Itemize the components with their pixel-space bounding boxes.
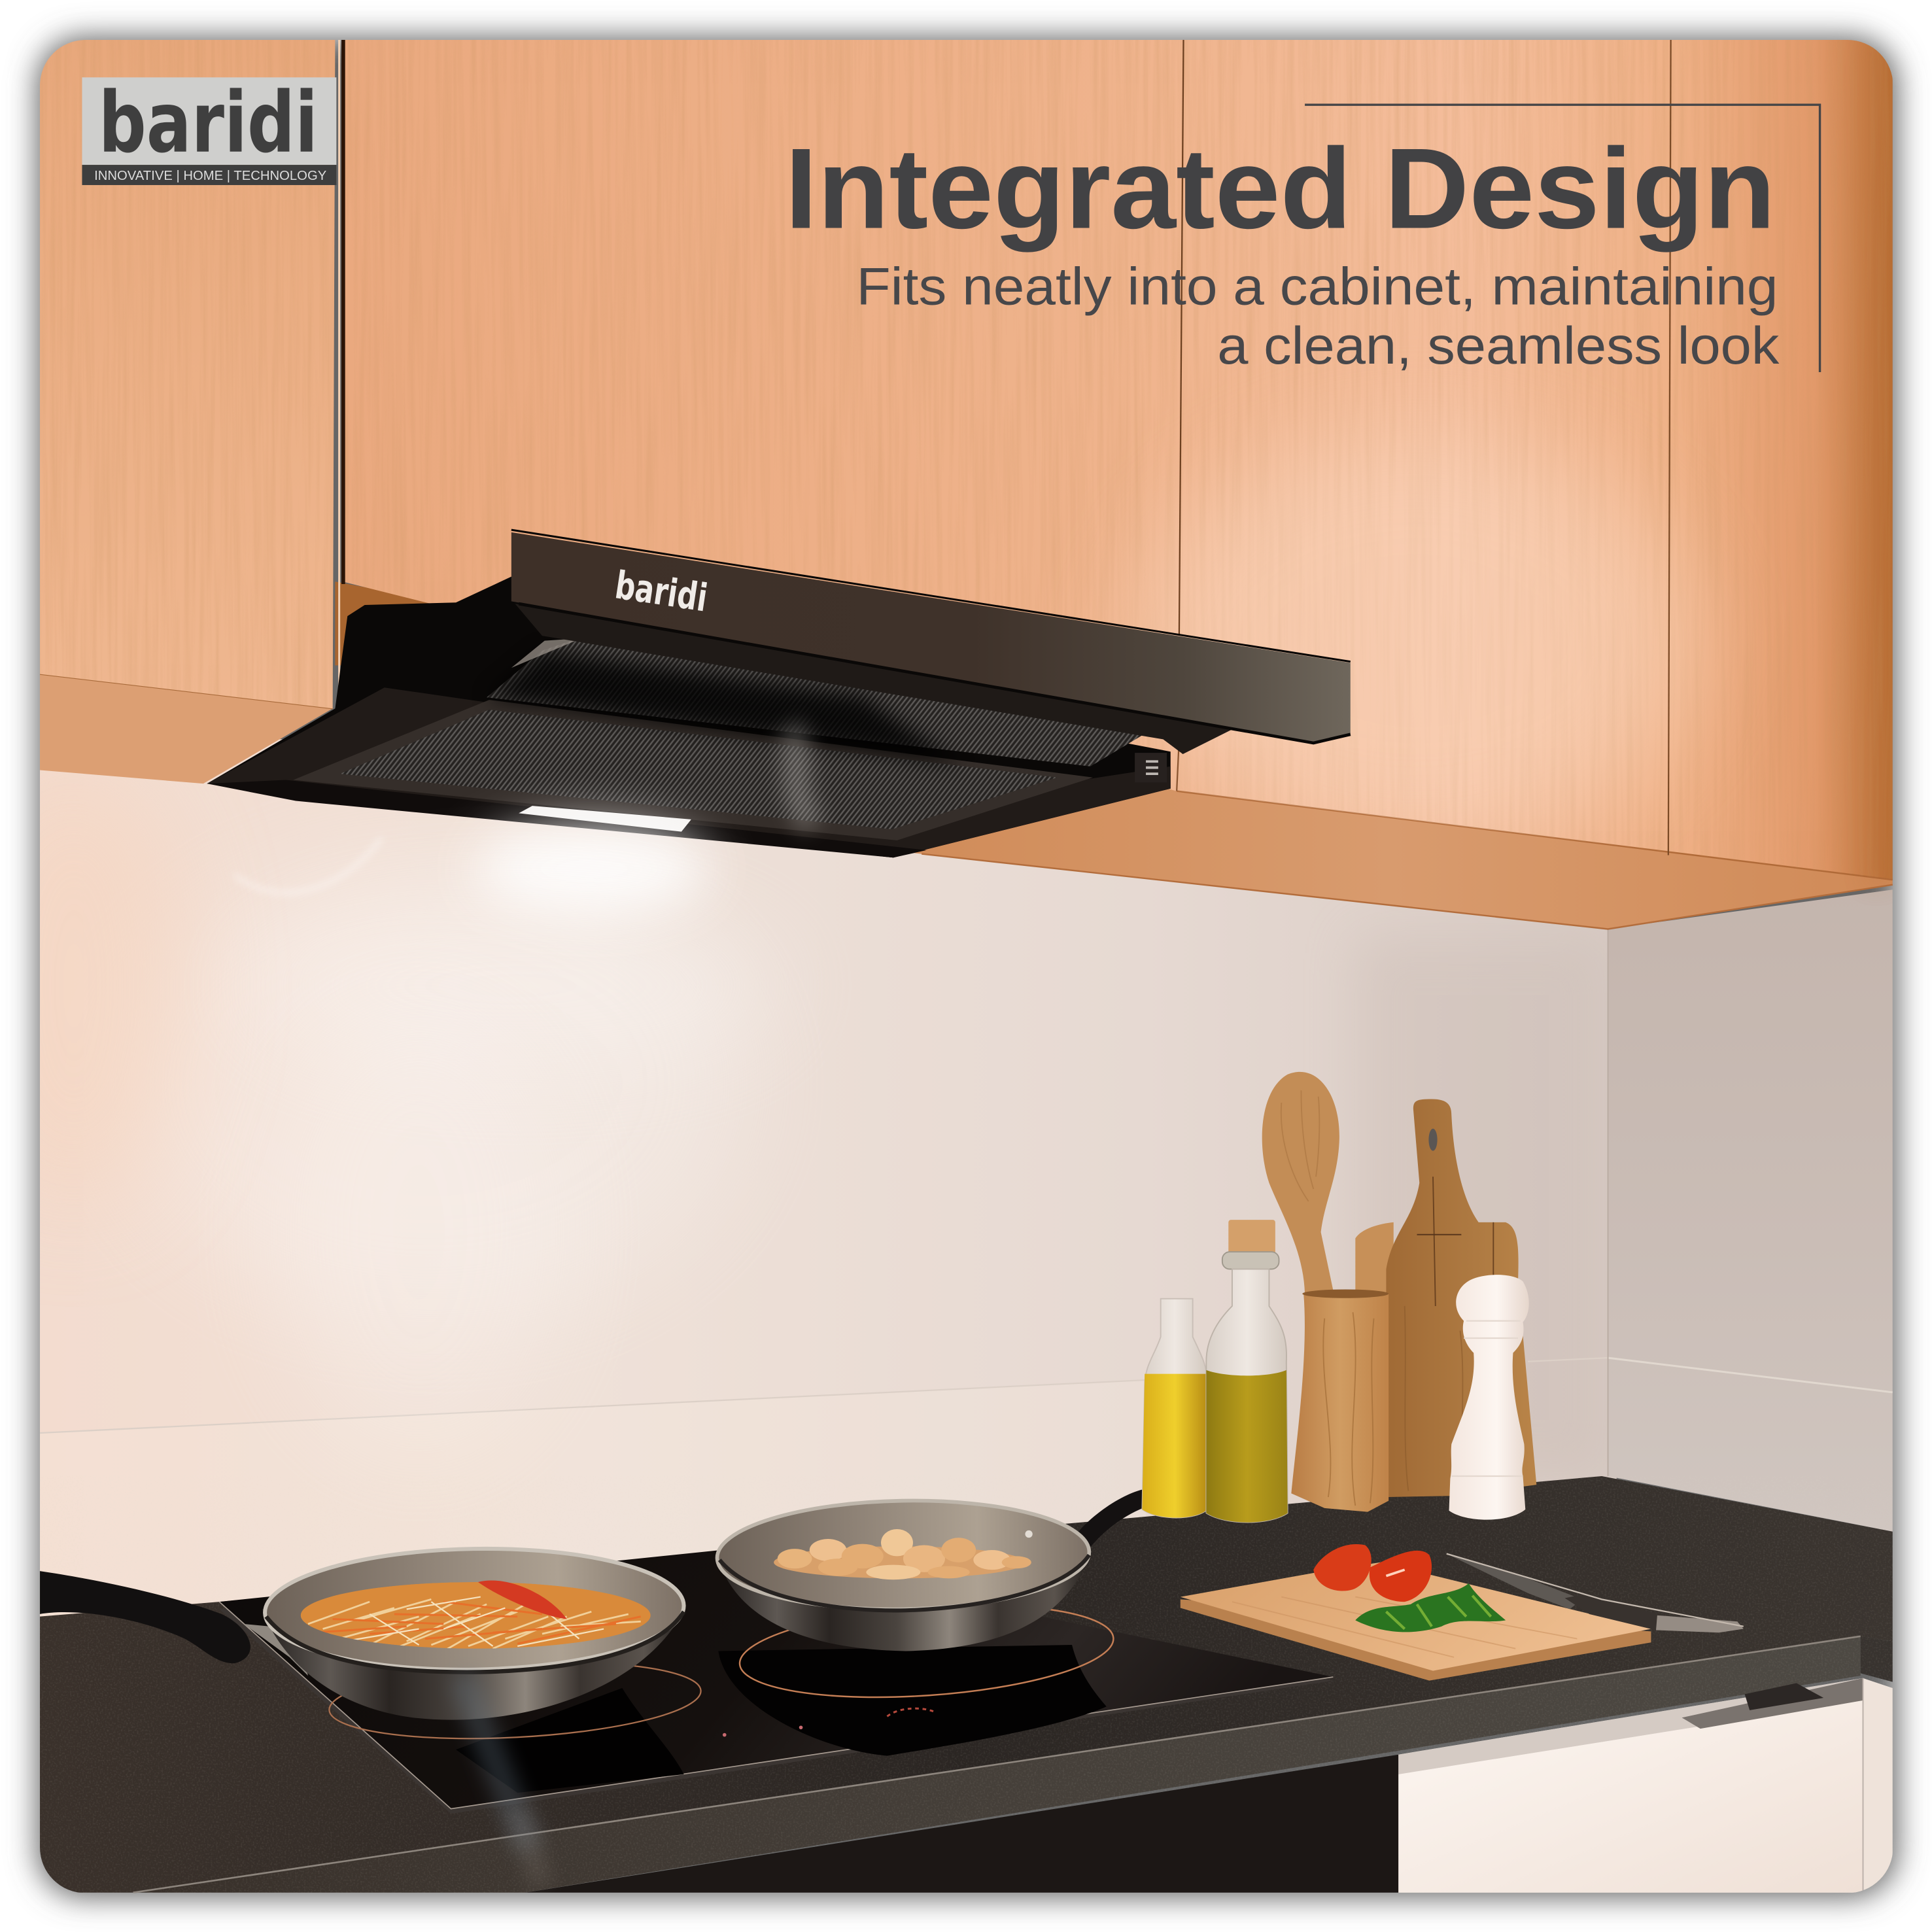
touch display marks [887,1708,937,1716]
pan interior [264,1545,685,1673]
right edge vignette [1861,39,1893,889]
wooden serving board [1386,1099,1536,1497]
wooden spoon [1262,1072,1339,1296]
pan handle [1069,1489,1155,1555]
left frying pan [39,1545,686,1720]
telescopic slider rail [515,604,1309,754]
steam [234,727,813,1454]
countertop [39,1476,1893,1893]
lower tray [207,687,1171,857]
tall oil bottle [1206,1220,1288,1523]
upper grease filter mesh [487,636,1152,767]
counter front edge [133,1636,1861,1893]
white base cabinet [1398,1678,1893,1893]
red pepper [478,1580,567,1619]
back wall [0,739,1617,1627]
lower grease filter mesh [340,710,1057,829]
counter speckle [39,1476,1893,1893]
pan outer body [262,1606,686,1720]
front fascia panel [511,532,1351,743]
kitchen knife [1447,1554,1744,1632]
noodles [301,1582,651,1651]
under-counter cabinet shadow [525,1755,1398,1893]
subheading [856,257,1780,375]
rear small cutting board [1355,1222,1394,1306]
chicken pieces [774,1529,1031,1579]
counter top surface [39,1476,1893,1893]
tomatoes [1313,1544,1432,1602]
right frying pan [716,1489,1155,1651]
burner rings [736,1594,1116,1708]
hood light [519,806,691,832]
dark smoke wisps over hob [462,1676,542,1885]
centre and right upper cabinets [335,39,1893,929]
cooker hood [207,530,1351,857]
subheading: Fits neatly into a cabinet, maintaining [856,257,1778,316]
left upper cabinet [39,39,335,784]
title bracket lines [1305,105,1820,372]
rear hood body [207,577,1171,857]
wood grain texture [39,39,1893,902]
control switch [1135,753,1167,782]
side wall [1608,889,1893,1532]
hob reflections [718,1645,1107,1756]
pan interior [716,1498,1090,1612]
herb garnish [1355,1583,1506,1632]
subheading: a clean, seamless look [1217,317,1780,375]
fascia logo: baridi [612,562,710,621]
cutting board on counter [1181,1562,1651,1681]
cabinet door seams [338,39,1671,855]
pepper mill [1449,1275,1529,1520]
logo badge [82,75,336,185]
heading: Integrated Design [785,125,1776,253]
pan outer body [717,1553,1092,1651]
pan handle [39,1571,250,1663]
utensil holder [1291,1290,1389,1512]
logo wordmark: baridi [99,75,318,172]
small oil bottle [1142,1299,1207,1518]
lower filter frame [293,700,1093,840]
induction hob [219,1550,1333,1814]
logo tagline: INNOVATIVE | HOME | TECHNOLOGY [94,169,326,183]
